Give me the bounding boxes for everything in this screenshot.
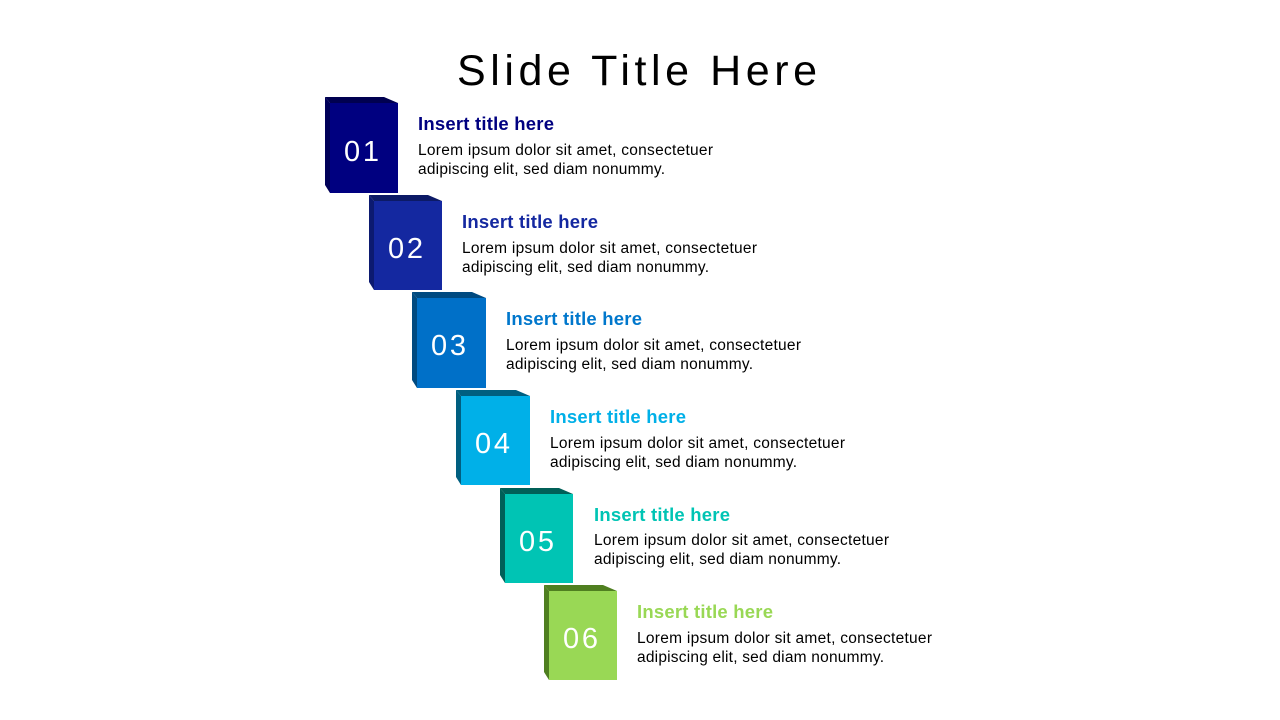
step 04 (456, 390, 845, 485)
step 03 (412, 292, 801, 388)
step 02 (369, 195, 757, 290)
block 06 (544, 585, 617, 680)
block 02 (369, 195, 442, 290)
text 02: Lorem ipsum dolor sit amet, consectetuer (462, 240, 757, 257)
text 03: adipiscing elit, sed diam nonummy. (506, 356, 753, 373)
text 06 (637, 601, 932, 666)
text 01: adipiscing elit, sed diam nonummy. (418, 161, 665, 178)
block 05 (500, 488, 573, 583)
title: Slide Title Here (457, 47, 817, 95)
step 01 (325, 97, 713, 193)
text 01: Insert title here (418, 113, 554, 134)
text 04 (550, 406, 845, 471)
block 01: 01 (344, 136, 379, 168)
text 01: Lorem ipsum dolor sit amet, consectetuer (418, 142, 713, 159)
block 06: 06 (563, 623, 598, 655)
text 05 (594, 504, 889, 568)
text 06: Lorem ipsum dolor sit amet, consectetuer (637, 630, 932, 647)
text 05: adipiscing elit, sed diam nonummy. (594, 551, 841, 568)
block 04 (456, 390, 530, 485)
text 02: adipiscing elit, sed diam nonummy. (462, 259, 709, 276)
block 03 (412, 292, 486, 388)
text 05: Insert title here (594, 504, 730, 525)
block 03: 03 (431, 330, 466, 362)
block 02: 02 (388, 233, 423, 265)
text 02 (462, 211, 757, 276)
text 03: Lorem ipsum dolor sit amet, consectetuer (506, 337, 801, 354)
text 06: Insert title here (637, 601, 773, 622)
text 02: Insert title here (462, 211, 598, 232)
block 05: 05 (519, 526, 554, 558)
text 04: adipiscing elit, sed diam nonummy. (550, 454, 797, 471)
text 06: adipiscing elit, sed diam nonummy. (637, 649, 884, 666)
text 01 (418, 113, 713, 178)
block 01 (325, 97, 398, 193)
text 05: Lorem ipsum dolor sit amet, consectetuer (594, 532, 889, 549)
text 04: Lorem ipsum dolor sit amet, consectetuer (550, 435, 845, 452)
block 04: 04 (475, 428, 510, 460)
step 06 (544, 585, 932, 680)
text 04: Insert title here (550, 406, 686, 427)
step 05 (500, 488, 889, 583)
text 03: Insert title here (506, 308, 642, 329)
text 03 (506, 308, 801, 373)
